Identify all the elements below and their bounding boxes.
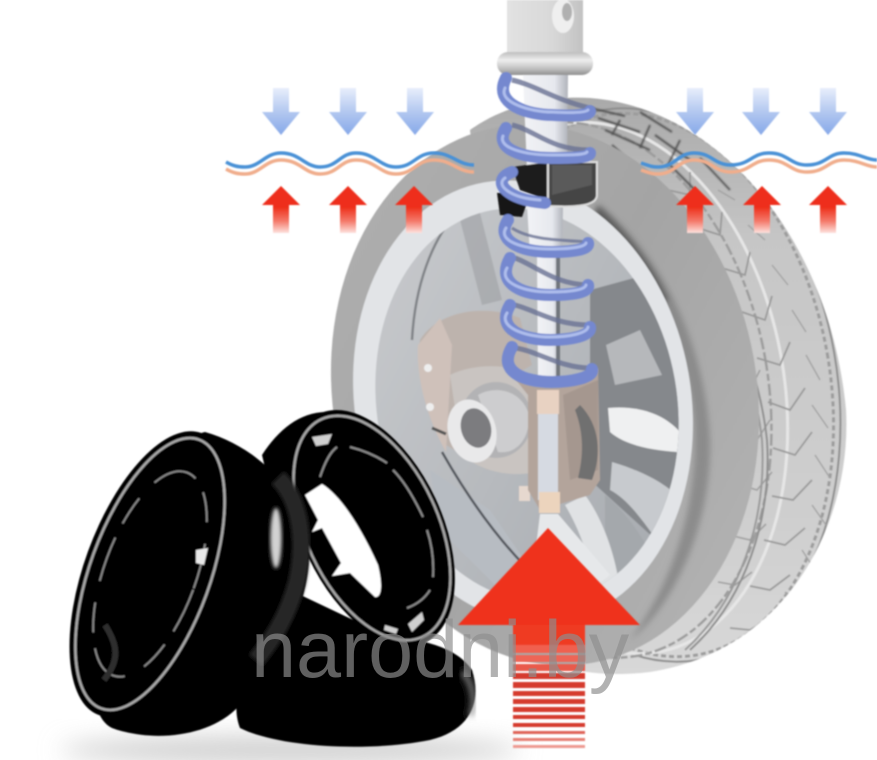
blue arrow 6 xyxy=(809,88,847,135)
striped arrow tail xyxy=(513,645,585,748)
blue arrow 5 xyxy=(742,88,780,135)
blue arrow 2 xyxy=(329,88,367,135)
back ring xyxy=(255,384,489,672)
red pressure arrows xyxy=(262,186,847,233)
piston rod xyxy=(523,75,568,385)
large red force arrow xyxy=(458,528,640,748)
sidewall dark top xyxy=(590,205,668,310)
red arrow 6 xyxy=(809,186,847,233)
blue arrow 4 xyxy=(676,88,714,135)
tire tread xyxy=(469,96,847,674)
bottom ring xyxy=(236,590,476,747)
ground shadow xyxy=(60,736,520,760)
red arrow 3 xyxy=(395,186,433,233)
red arrow 5 xyxy=(743,186,781,233)
strut knuckle xyxy=(512,368,600,513)
sidewall dark shading xyxy=(598,205,710,640)
shock absorber xyxy=(497,0,597,385)
dark top tread grooves xyxy=(590,108,730,195)
rim disc xyxy=(345,184,709,626)
strut top mount xyxy=(497,0,593,75)
tire sidewall xyxy=(289,90,801,700)
outer chevrons xyxy=(718,190,830,610)
arrow tail xyxy=(513,625,585,645)
arrow head xyxy=(458,528,640,625)
central white spoke below strut xyxy=(535,514,610,590)
tire sidewall edge lines xyxy=(606,145,768,650)
red arrow 2 xyxy=(329,186,367,233)
blue pressure arrows xyxy=(262,88,847,135)
watermark: narodni.by xyxy=(251,605,630,695)
brake disc and hub xyxy=(418,311,545,501)
red arrow 1 xyxy=(262,186,300,233)
left membrane wave xyxy=(226,153,474,174)
blue arrow 1 xyxy=(262,88,300,135)
inner chevrons xyxy=(718,370,772,586)
bump stop xyxy=(497,162,597,217)
front ring xyxy=(37,410,309,738)
rim lip xyxy=(319,153,727,651)
red arrow 4 xyxy=(676,186,714,233)
blue arrow 3 xyxy=(396,88,434,135)
wheel spokes xyxy=(410,213,680,585)
spring coils xyxy=(502,78,592,382)
middle chevrons xyxy=(668,172,812,630)
spring coil back segments xyxy=(512,80,590,368)
right membrane wave xyxy=(641,153,877,174)
wheel assembly xyxy=(330,96,847,674)
rubber spacer rings xyxy=(37,384,489,747)
